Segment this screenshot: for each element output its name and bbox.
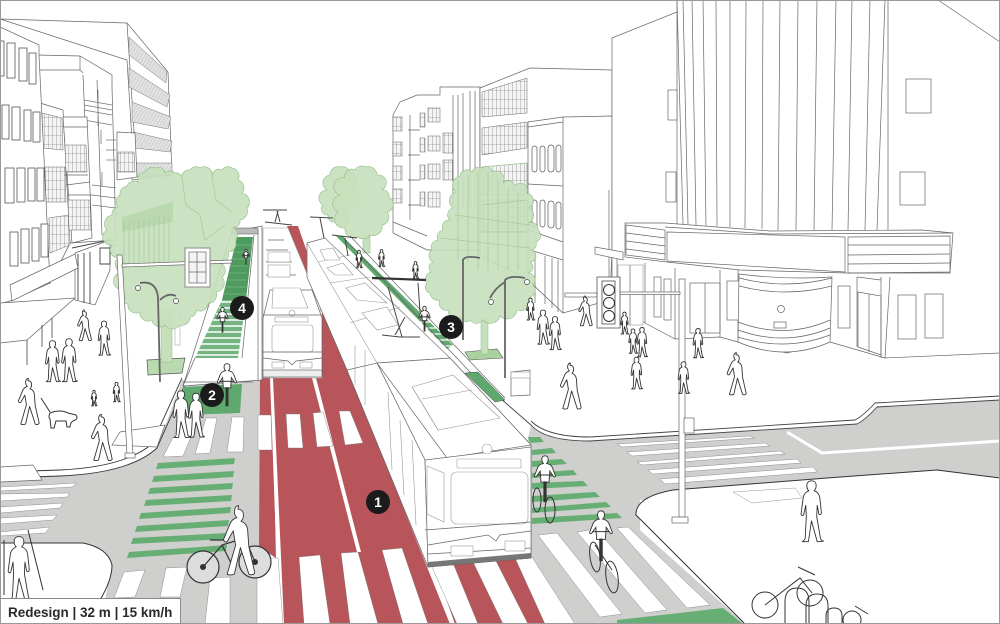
callout 3: 3 — [447, 319, 455, 335]
cyclist far — [243, 249, 249, 265]
callout 4: 4 — [238, 300, 246, 316]
left corner ramp — [0, 465, 42, 482]
green cycle crossing left — [127, 458, 235, 558]
road surface — [0, 380, 1000, 624]
big tram roof unit — [412, 375, 500, 430]
cyclist right of tram — [533, 456, 555, 523]
cyclist 2 — [217, 364, 237, 406]
far tram behind — [263, 228, 322, 378]
platform kerb and stop — [183, 228, 258, 386]
green patch 3 — [465, 372, 505, 402]
cinema canopy — [625, 223, 953, 273]
cyclist lane 3 — [419, 306, 430, 332]
white tram lane lines — [270, 378, 361, 624]
tram on left track — [263, 288, 322, 377]
cycle lane 3 — [336, 236, 505, 398]
pedestrians left sidewalk — [18, 310, 120, 461]
pedestrians at green patch — [173, 391, 205, 438]
cinema marquee sign — [595, 247, 623, 260]
callout 2: 2 — [208, 387, 216, 403]
caption label — [0, 598, 180, 624]
big tree left — [103, 167, 249, 375]
far tree B — [333, 166, 393, 253]
bike racks — [752, 567, 868, 624]
panel: cycle lane 4 in green — [195, 237, 253, 358]
right background buildings — [393, 68, 612, 313]
platform with cycle lane — [183, 226, 262, 386]
panel: tram articulated train — [307, 238, 531, 567]
cinema round drum — [738, 274, 832, 352]
callout 3 — [439, 315, 463, 339]
cyclist on crossing — [588, 511, 620, 594]
far tree A — [319, 167, 359, 226]
pedestrian crossing bars — [0, 411, 817, 624]
panel: cinema building — [595, 0, 1000, 358]
pedestrians right sidewalk — [356, 250, 746, 409]
large pedestrian — [801, 481, 823, 542]
panel: tram lane in red — [259, 226, 575, 624]
tram pantographs — [263, 210, 426, 337]
left buildings — [0, 19, 172, 375]
road centre line — [787, 432, 1000, 453]
sweeper bottom left — [4, 530, 43, 600]
bottom left sidewalk — [0, 543, 112, 600]
bottom right sidewalk — [636, 470, 1000, 624]
pedestrian walking a bicycle — [187, 506, 271, 583]
bottom green patch — [617, 608, 743, 624]
callout 1 — [366, 490, 390, 514]
dog — [41, 398, 77, 428]
callout 4 — [230, 296, 254, 320]
big tram front — [425, 444, 531, 567]
streetlamps and poles — [136, 257, 530, 382]
traffic light left — [112, 248, 232, 458]
callout 2 — [200, 383, 224, 407]
green cycle crossing right — [528, 437, 622, 524]
caption label: Redesign | 32 m | 15 km/h — [8, 605, 172, 620]
left sidewalk kerb — [0, 378, 187, 478]
right sidewalk kerb — [470, 372, 1000, 441]
bin — [511, 370, 530, 396]
traffic light right — [597, 277, 694, 523]
cyclist 4 — [217, 307, 228, 333]
callout 1: 1 — [374, 494, 382, 510]
green patch 2 — [183, 384, 242, 415]
big tree right — [425, 163, 541, 360]
